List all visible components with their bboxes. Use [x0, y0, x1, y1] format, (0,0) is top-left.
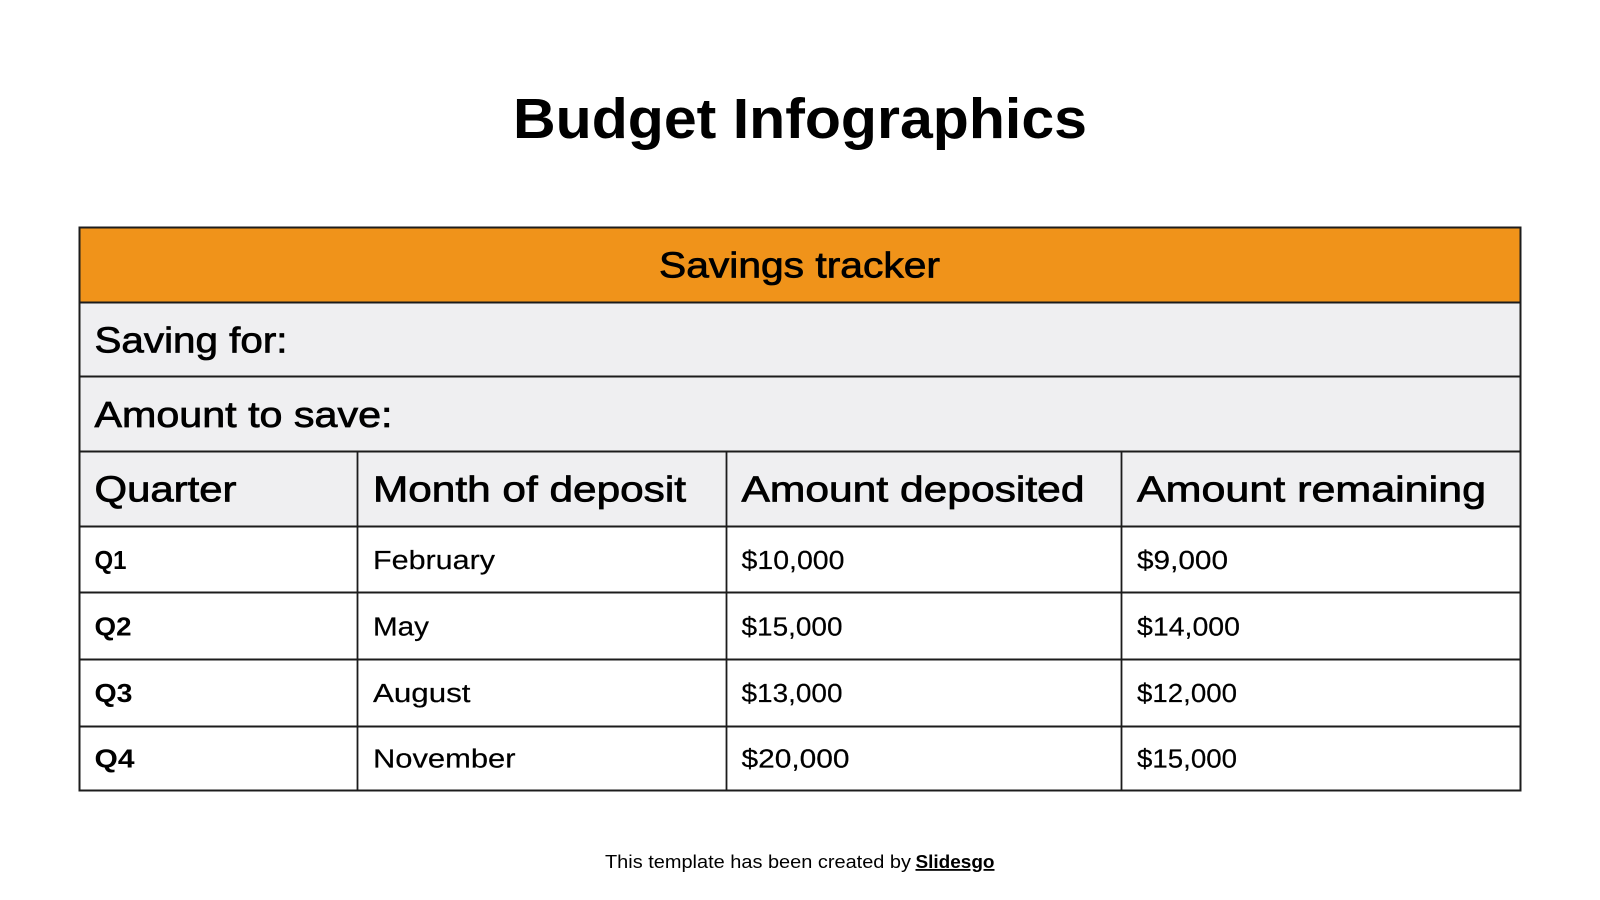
- row: Q1: [94, 547, 1228, 575]
- row: column headers: Month of deposit: [373, 468, 686, 510]
- row: Q4: $15,000: [1137, 746, 1237, 774]
- row: Q2: $14,000: [1137, 614, 1240, 642]
- row: Q2: [94, 614, 1240, 642]
- row: Q3: [94, 680, 1237, 708]
- row: Q1: $9,000: [1137, 547, 1228, 575]
- row: Q1: Q1: [94, 547, 126, 575]
- row: column headers: Amount remaining: [1137, 468, 1486, 510]
- row: amount to save: Amount to save:: [94, 394, 392, 435]
- row: Q4: [94, 746, 1237, 774]
- row: Q2: Q2: [94, 614, 132, 642]
- row: Q4: November: [373, 746, 516, 774]
- table header band: Savings tracker: [659, 244, 940, 286]
- row: column headers: Quarter: [94, 468, 237, 510]
- row: Q1: February: [373, 547, 495, 575]
- row: Q4: Q4: [94, 746, 135, 774]
- footer credit: This template has been created by: [605, 852, 911, 872]
- row: Q2: $15,000: [742, 614, 842, 642]
- footer credit: Slidesgo: [916, 852, 995, 872]
- row: column headers: Amount deposited: [742, 468, 1084, 510]
- row: Q2: May: [373, 614, 429, 642]
- row: Q3: August: [373, 680, 470, 708]
- table grid lines: [80, 228, 1520, 790]
- row: Q3: Q3: [94, 680, 132, 708]
- row: Q1: $10,000: [742, 547, 844, 575]
- row: saving for: [80, 302, 1520, 376]
- table header band: [80, 228, 1520, 302]
- title: Budget Infographics: [513, 87, 1087, 151]
- row: Q4: $20,000: [742, 746, 850, 774]
- row: Q3: $13,000: [742, 680, 842, 708]
- row: column headers: [80, 452, 1520, 526]
- row: Q3: $12,000: [1137, 680, 1237, 708]
- row: amount to save: [80, 376, 1520, 452]
- panel: savings tracker table: [80, 228, 1520, 790]
- row: saving for: Saving for:: [94, 320, 288, 360]
